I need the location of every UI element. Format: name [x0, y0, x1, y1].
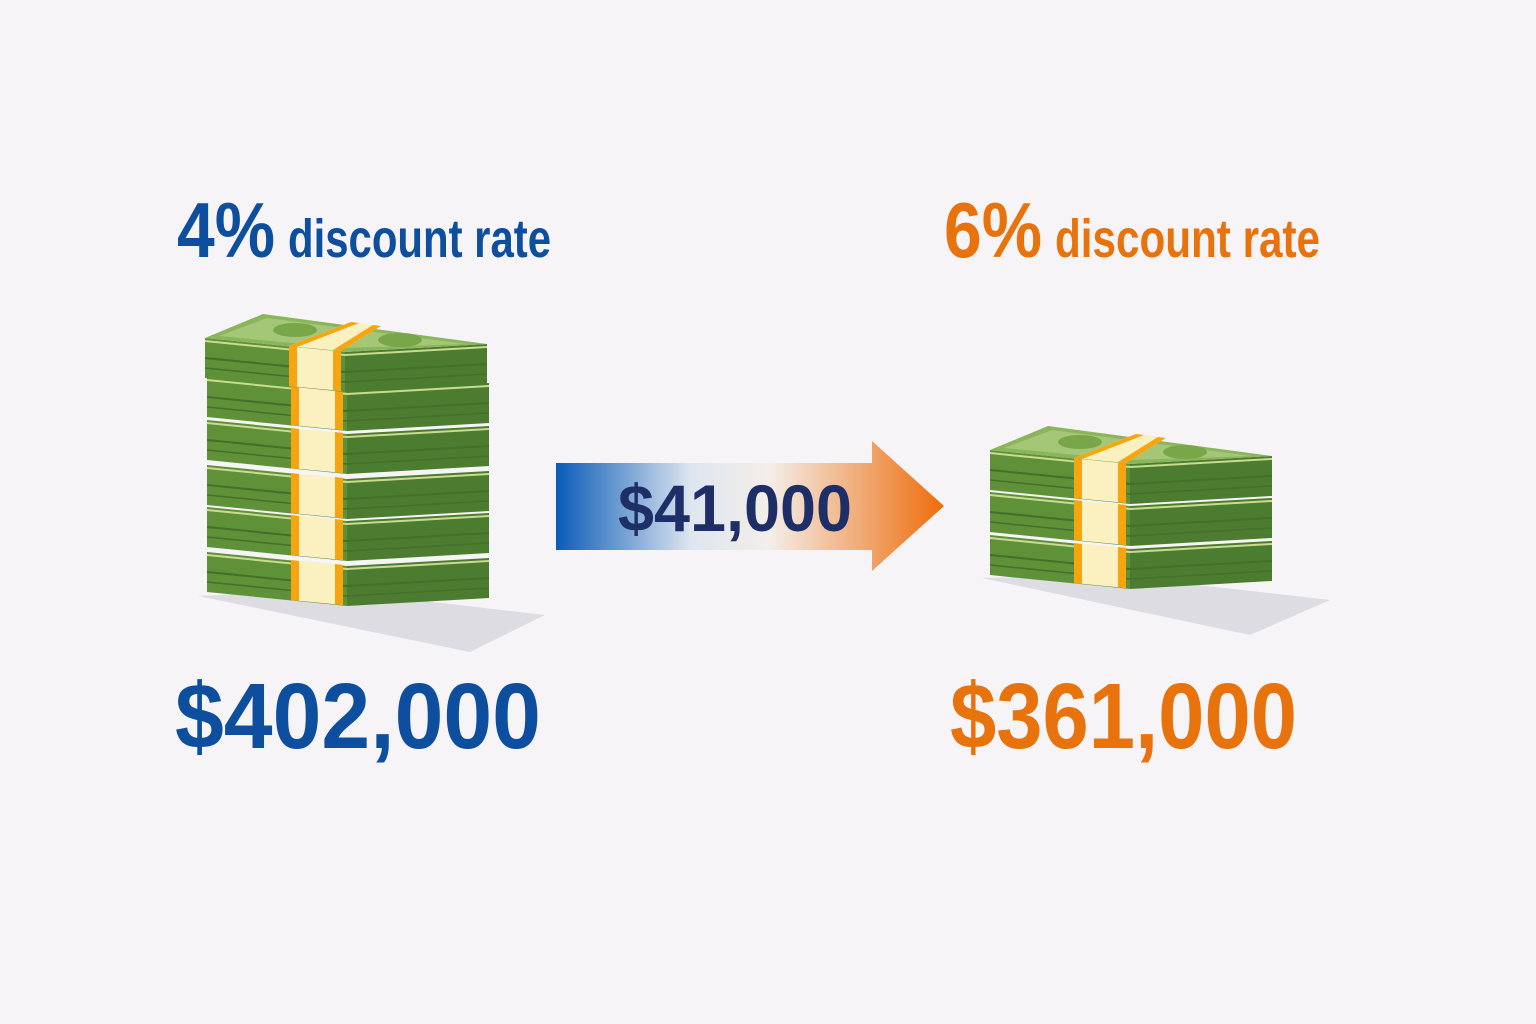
heading: 4% discount rate	[177, 186, 551, 274]
heading: 6% discount rate: discount rate	[1055, 209, 1320, 269]
heading: 6% discount rate	[944, 186, 1320, 274]
heading: 4% discount rate: discount rate	[288, 209, 551, 269]
value: $402,000: $402,000	[175, 664, 541, 768]
heading: 6% discount rate: 6%	[944, 186, 1042, 274]
arrow with difference: $41,000	[618, 471, 852, 545]
icon: tall money stack	[198, 314, 545, 652]
icon: short money stack	[982, 426, 1330, 635]
arrow with difference	[556, 441, 944, 571]
value: $361,000: $361,000	[950, 664, 1297, 768]
heading: 4% discount rate: 4%	[177, 186, 275, 274]
